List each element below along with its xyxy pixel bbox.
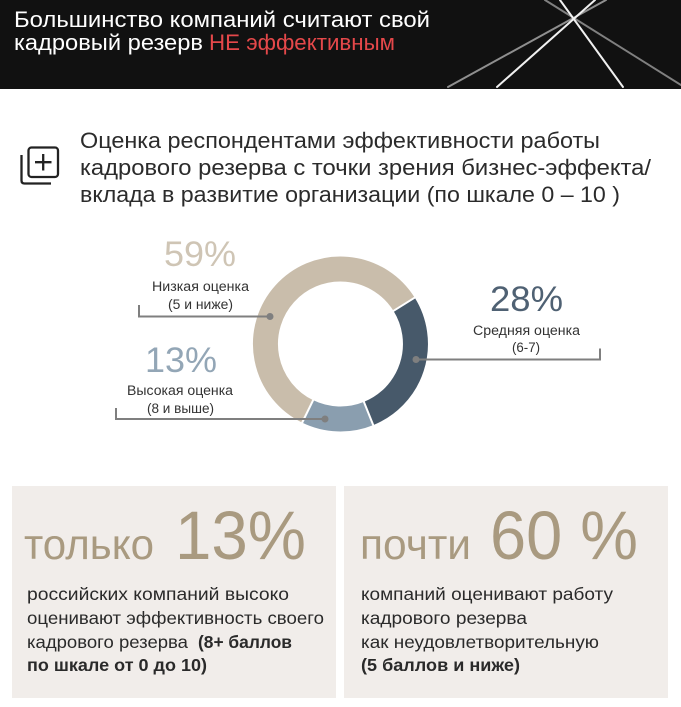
panel text: (8+ баллов [198,632,292,652]
callout: high score: (8 и выше) [147,401,214,416]
subtitle: Оценка респондентами эффективности работы [80,128,600,153]
callout: high score [116,341,328,422]
callout: low score [139,235,274,320]
callout: high score: 13% [145,341,217,380]
panel heading: только [24,521,154,569]
panel heading [24,497,306,574]
panel text: российских компаний высоко [27,584,289,604]
icon: add to stack [22,148,58,184]
panel text [27,584,324,675]
panel text: компаний оценивают работу [361,584,613,604]
decorative crossing lines [448,0,681,87]
header band [0,0,681,89]
segment: high 13% [308,411,369,419]
callout: medium score: 28% [490,280,563,319]
callout: low score: Низкая оценка [152,279,250,294]
panel heading: почти [360,521,471,569]
panel text: как неудовлетворительную [361,632,599,652]
panel: only 13% [12,486,336,698]
panel text: кадрового резерва [27,632,188,652]
callout: low score: (5 и ниже) [168,297,233,312]
panel text: кадрового резерва [361,608,527,628]
subtitle: вклада в развитие организации (по шкале 0 – 10 ) [80,182,620,207]
panel text: оценивают эффективность своего [27,608,324,628]
callout: low score: 59% [164,235,236,274]
callout: medium score: Средняя оценка [473,323,581,338]
title: НЕ эффективным [209,30,395,55]
donut chart [265,269,416,426]
panel heading: 13% [175,497,306,574]
panel: almost 60% [344,486,668,698]
segment: medium 28% [369,304,415,414]
panel text [361,584,613,675]
panel heading [360,497,638,574]
panel text: по шкале от 0 до 10) [27,655,207,675]
segment: low 59% [265,269,404,411]
title [14,7,430,55]
title: Большинство компаний считают свой [14,7,430,32]
panel heading: 60 % [490,497,638,574]
callout: medium score: (6-7) [512,340,540,355]
callout: medium score [412,280,600,363]
subtitle: кадрового резерва с точки зрения бизнес-эффекта/ [80,155,652,180]
callout: high score: Высокая оценка [127,383,234,398]
title: кадровый резерв [14,30,203,55]
subtitle [80,128,652,207]
panel text: (5 баллов и ниже) [361,655,520,675]
